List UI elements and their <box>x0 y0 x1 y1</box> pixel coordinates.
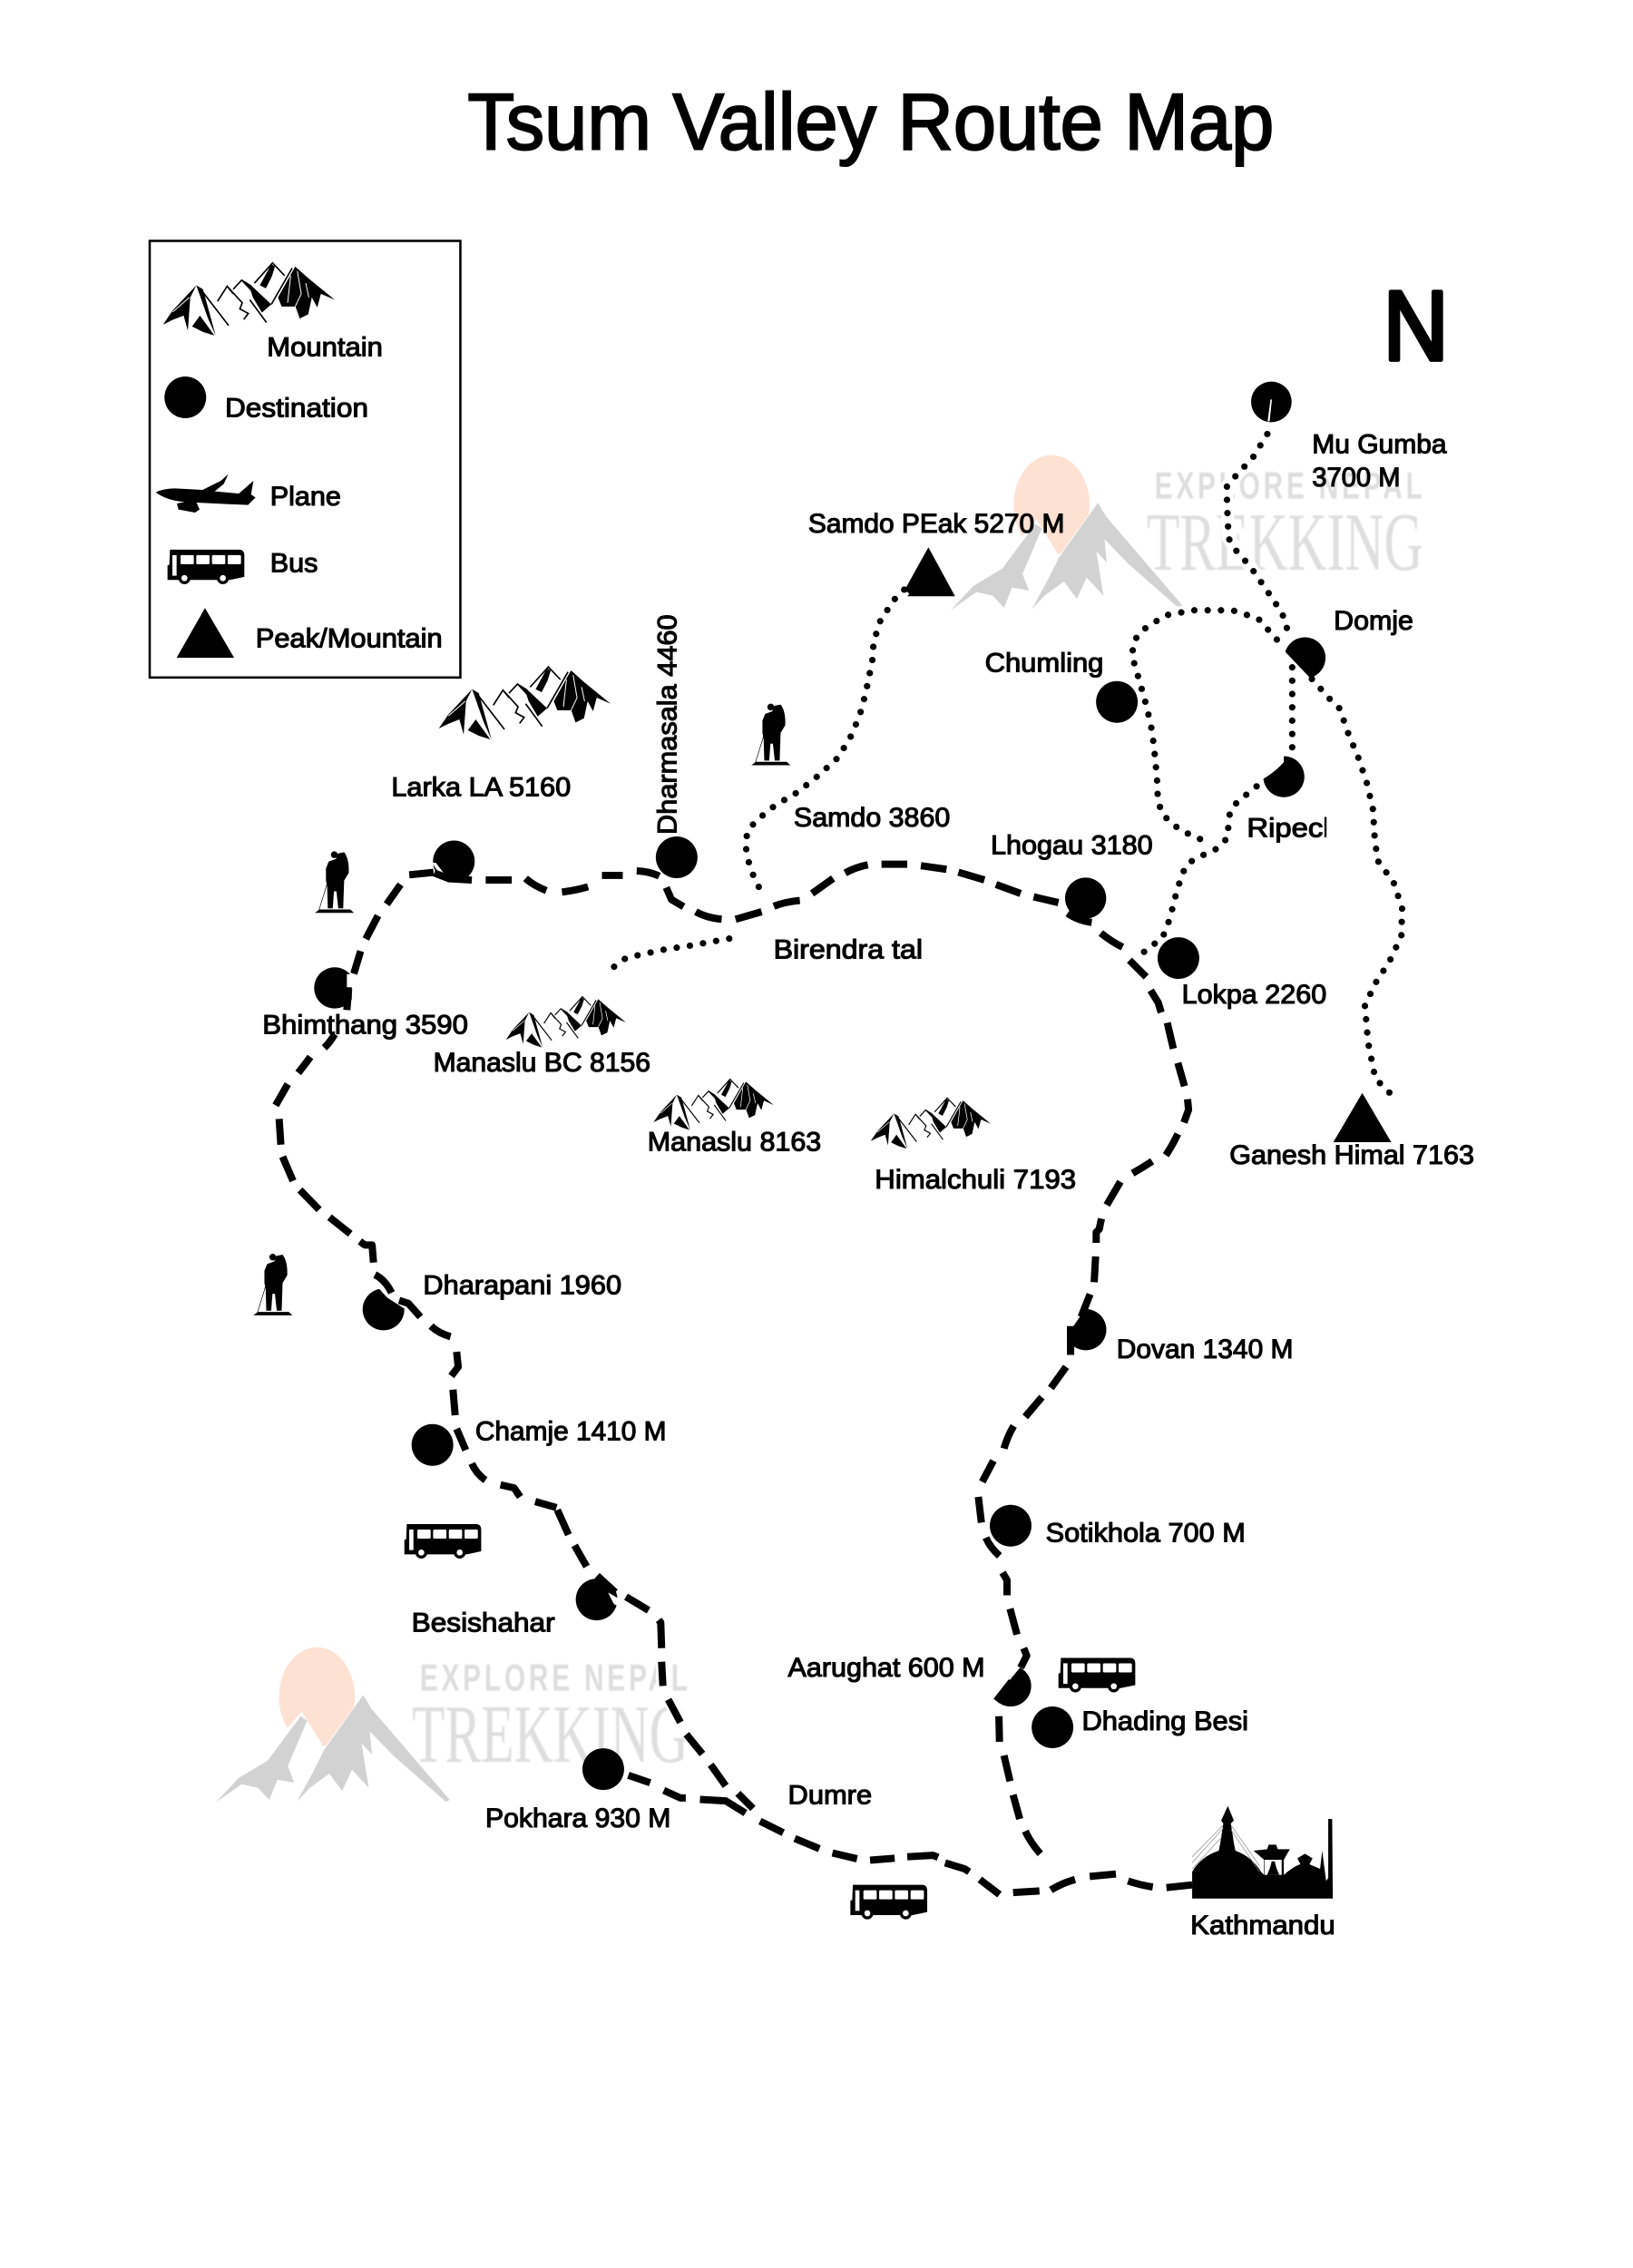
icon: destination legend <box>164 376 206 418</box>
labels: Manaslu 8163 <box>648 1128 821 1158</box>
labels: 3700 M <box>1312 463 1401 493</box>
labels: Ganesh Himal 7163 <box>1229 1140 1474 1170</box>
mountain icon: Manaslu <box>653 1080 774 1129</box>
labels: Lokpa 2260 <box>1182 980 1326 1010</box>
labels: Chamje 1410 M <box>475 1417 667 1447</box>
labels: Dhading Besi <box>1081 1706 1248 1736</box>
panel: legend <box>150 241 460 678</box>
icon: peak legend <box>177 608 234 658</box>
white route halos <box>279 399 1402 1894</box>
title: Tsum Valley Route Map <box>467 77 1274 166</box>
labels: Ripech <box>1247 813 1340 843</box>
watermark: bottom logo: EXPLORE NEPAL <box>420 1656 688 1699</box>
labels: Pokhara 930 M <box>485 1804 670 1833</box>
hiker icon: Samdo <box>751 704 790 766</box>
icon: plane <box>156 474 256 513</box>
mountain icon: Himalchuli <box>871 1098 991 1149</box>
labels: Dovan 1340 M <box>1117 1334 1293 1364</box>
destination dots not cut by routes <box>412 681 1199 1790</box>
label: plane: Plane <box>270 482 341 512</box>
labels: Mu Gumba <box>1312 429 1447 459</box>
labels: Aarughat 600 M <box>788 1653 985 1683</box>
route: Birendra tal dotted <box>614 938 734 967</box>
labels: Samdo 3860 <box>794 803 950 833</box>
route: Samdo Peak dotted <box>746 590 905 897</box>
labels: Samdo PEak 5270 M <box>808 509 1064 539</box>
route: Domje to Ganesh Himal dotted <box>1312 679 1402 1093</box>
route: Pokhara to Kathmandu <box>629 1775 1192 1894</box>
route: Chumling loop dotted <box>1132 611 1276 844</box>
watermark: top logo <box>951 455 1423 611</box>
icon: bus legend <box>168 550 244 584</box>
route: main circuit <box>276 865 1188 1853</box>
hiker icon: Larka <box>315 851 354 913</box>
north marker: N <box>1384 271 1449 381</box>
labels: Kathmandu <box>1190 1911 1335 1941</box>
label: destination legend: Destination <box>225 394 368 424</box>
labels: Manaslu BC 8156 <box>434 1048 650 1078</box>
labels: Dharmasala 4460 <box>652 614 682 835</box>
watermark: bottom logo <box>216 1647 689 1803</box>
labels: Chumling <box>985 648 1103 678</box>
icon: mountain legend <box>163 263 335 336</box>
labels: Bhimthang 3590 <box>262 1010 468 1040</box>
watermark: bottom logo: TREKKING <box>412 1688 689 1780</box>
labels: Sotikhola 700 M <box>1046 1518 1246 1548</box>
peak: Samdo <box>901 547 955 596</box>
labels: Himalchuli 7193 <box>875 1165 1076 1195</box>
route: Domje to Ripech dotted <box>1290 668 1295 748</box>
labels: Lhogau 3180 <box>991 830 1153 860</box>
route: Ripech to Lokpa dotted <box>1140 787 1257 954</box>
watermark: top logo: TREKKING <box>1147 496 1423 588</box>
peak: Ganesh Himal <box>1334 1093 1392 1142</box>
white cuts on destination dots <box>347 399 1311 1703</box>
bus icon: Besishahar <box>405 1524 481 1559</box>
watermark: top logo: EXPLORE NEPAL <box>1155 464 1423 506</box>
labels: Domje <box>1334 606 1413 636</box>
bus icon: Dumre <box>850 1885 927 1920</box>
destination dots cut by routes <box>314 382 1325 1706</box>
labels: Dharapani 1960 <box>423 1271 621 1301</box>
route: Mu Gumba to Domje dotted <box>1227 434 1286 639</box>
label: peak legend: Peak/Mountain <box>256 623 443 653</box>
label: mountain legend: Mountain <box>267 333 383 363</box>
bus icon: Aarughat <box>1059 1657 1135 1692</box>
labels <box>262 429 1474 1941</box>
mountain icon: Manaslu BC <box>506 997 626 1047</box>
labels: Dumre <box>788 1780 872 1810</box>
mountain icon: Larka <box>439 667 611 739</box>
label: bus: Bus <box>270 548 318 578</box>
labels: Birendra tal <box>774 934 923 964</box>
labels: Larka LA 5160 <box>391 773 571 803</box>
labels: Besishahar <box>412 1608 555 1637</box>
icon: Kathmandu stupa <box>1192 1806 1333 1899</box>
hiker icon: Dharapani <box>253 1254 292 1315</box>
